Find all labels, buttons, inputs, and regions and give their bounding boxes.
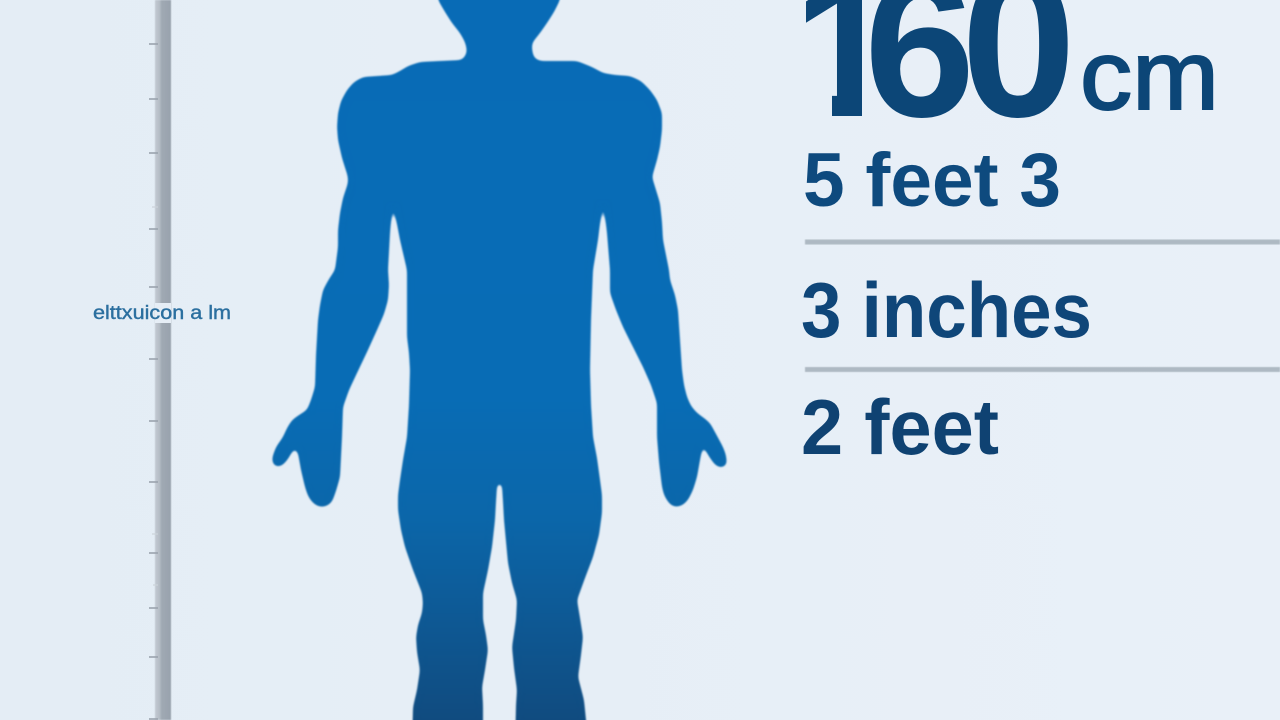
main height value [806, 0, 1214, 118]
divider [805, 367, 1280, 372]
height ruler [149, 0, 171, 720]
human silhouette [272, 0, 727, 720]
divider [805, 240, 1280, 244]
feet row: 2 feet [801, 383, 999, 471]
inches row: 3 inches [801, 266, 1092, 354]
ruler label: elttxuicon a lm [93, 303, 231, 324]
unit: cm: cm [1080, 20, 1219, 130]
height in feet: 5 feet 3 [803, 138, 1061, 223]
